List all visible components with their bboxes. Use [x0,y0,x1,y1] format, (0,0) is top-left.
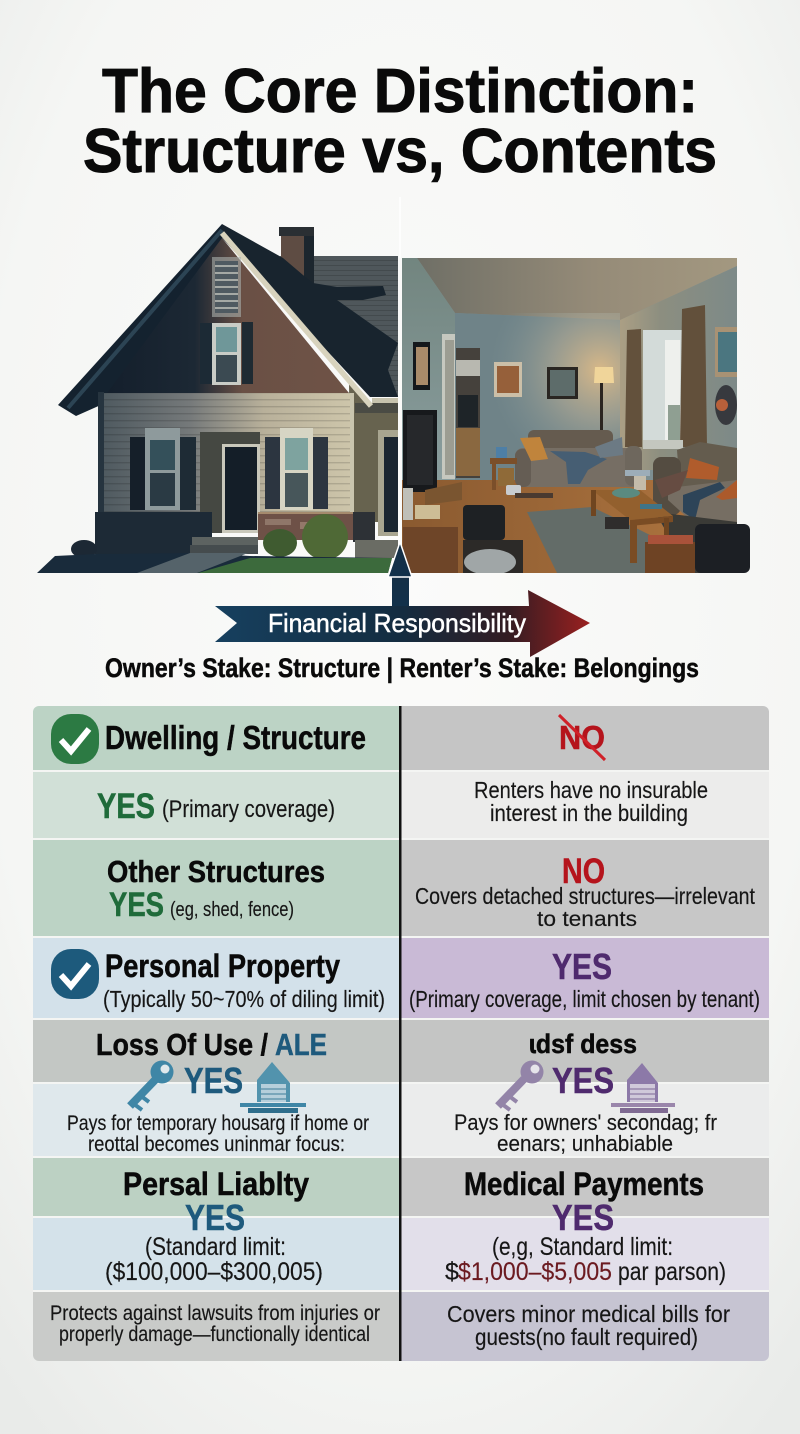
row: dwelling / structure [51,714,708,826]
gable vent [212,257,241,317]
TV stand and clutter [403,410,523,575]
row: other structures [107,852,756,931]
front door [200,432,260,533]
row: loss of use [67,1027,717,1156]
roof shadow [222,224,398,397]
subtitle: Owner’s Stake: Structure | Renter’s Stake: Belongings [105,653,699,683]
icon: purple building [611,1063,675,1113]
row: dwelling / structure: Renters have no insurable [474,777,708,803]
row: loss of use: reottal becomes uninmar focus: [88,1133,345,1156]
armchair [695,524,750,573]
icon: green check badge [51,714,99,764]
row: liability and medical: $ [445,1258,459,1286]
icon: teal building [240,1062,306,1113]
front steps [190,537,398,558]
row: loss of use: Pays for temporary housarg if home or [67,1112,369,1135]
row: other structures: Other Structures [107,854,325,889]
row: personal property: (Typically 50~70% of diling limit) [103,986,385,1012]
floor lamp [594,367,614,430]
illustration: living room interior [402,258,750,575]
stone base [95,512,375,554]
right wing [349,380,398,536]
icon: teal key [130,1060,174,1110]
area rug [527,507,650,573]
crossed-out no: NO [559,719,605,756]
main sofa [515,430,642,487]
row: liability and medical [50,1166,730,1350]
row: liability and medical: Persal Liablty [123,1166,309,1202]
row: personal property: Personal Property [105,948,340,984]
row: liability and medical: properly damage—functionally identical [59,1323,370,1346]
icon: blue check badge [51,949,99,999]
row: dwelling / structure: Dwelling / Structure [105,719,366,756]
row: personal property [51,946,760,1012]
row: liability and medical: ($100,000–$300,005) [105,1258,323,1286]
comparison table [33,706,769,1361]
icon: purple key [498,1060,544,1110]
curtains and window [625,305,707,449]
row: liability and medical: Medical Payments [464,1166,704,1202]
side table [490,447,517,490]
door and hallway [442,334,480,479]
row: loss of use: ɩdsf dess [529,1029,637,1059]
row: other structures: to tenants [537,908,637,931]
row: loss of use: YES [184,1060,243,1101]
row: liability and medical: Protects against lawsuits from injuries or [50,1302,380,1325]
row: liability and medical: (e,g, Standard limit: [492,1233,673,1261]
row: other structures: (eg, shed, fence) [170,899,294,921]
row: personal property: YES [552,946,612,987]
row: liability and medical: guests(no fault required) [475,1324,698,1350]
row: dwelling / structure: (Primary coverage) [162,796,335,823]
lower right window [265,428,328,510]
title: The Core Distinction: [102,57,698,126]
coffee table [591,488,673,563]
chimney [279,227,314,298]
row: liability and medical: Covers minor medical bills for [447,1301,730,1327]
row: liability and medical: par parson) [618,1258,726,1286]
vertical arrow [388,542,412,608]
row: dwelling / structure: interest in the building [490,800,688,826]
title [83,57,717,186]
title: Structure vs, Contents [83,117,717,186]
upper window [200,322,253,385]
illustration: house exterior [37,224,398,573]
horizontal banner arrow [215,590,590,657]
arrow: financial responsibility [215,542,590,657]
lower wall siding [103,393,354,520]
row: liability and medical: YES [552,1197,614,1238]
ground [37,553,392,573]
back roof [280,256,398,397]
row: liability and medical: (Standard limit: [145,1233,286,1261]
row: loss of use: Pays for owners' secondag; fr [454,1110,717,1135]
right sofa [625,442,737,522]
lower left window [130,428,196,510]
row: dwelling / structure: YES [97,787,155,826]
floor clutter [506,485,695,573]
row: loss of use: Loss Of Use / [96,1027,268,1062]
gable wall [107,238,349,393]
row: other structures: NO [562,852,605,891]
row: loss of use: YES [552,1060,614,1101]
row: loss of use: ALE [275,1027,327,1062]
row: loss of use: eenars; unhabiable [497,1131,673,1156]
row: other structures: YES [109,886,164,924]
wall paintings [413,327,737,425]
shrubs [71,514,348,560]
row: liability and medical: $1,000–$5,005 [458,1258,612,1286]
arrow label: Financial Responsibility [268,608,526,638]
row: liability and medical: YES [185,1197,245,1238]
